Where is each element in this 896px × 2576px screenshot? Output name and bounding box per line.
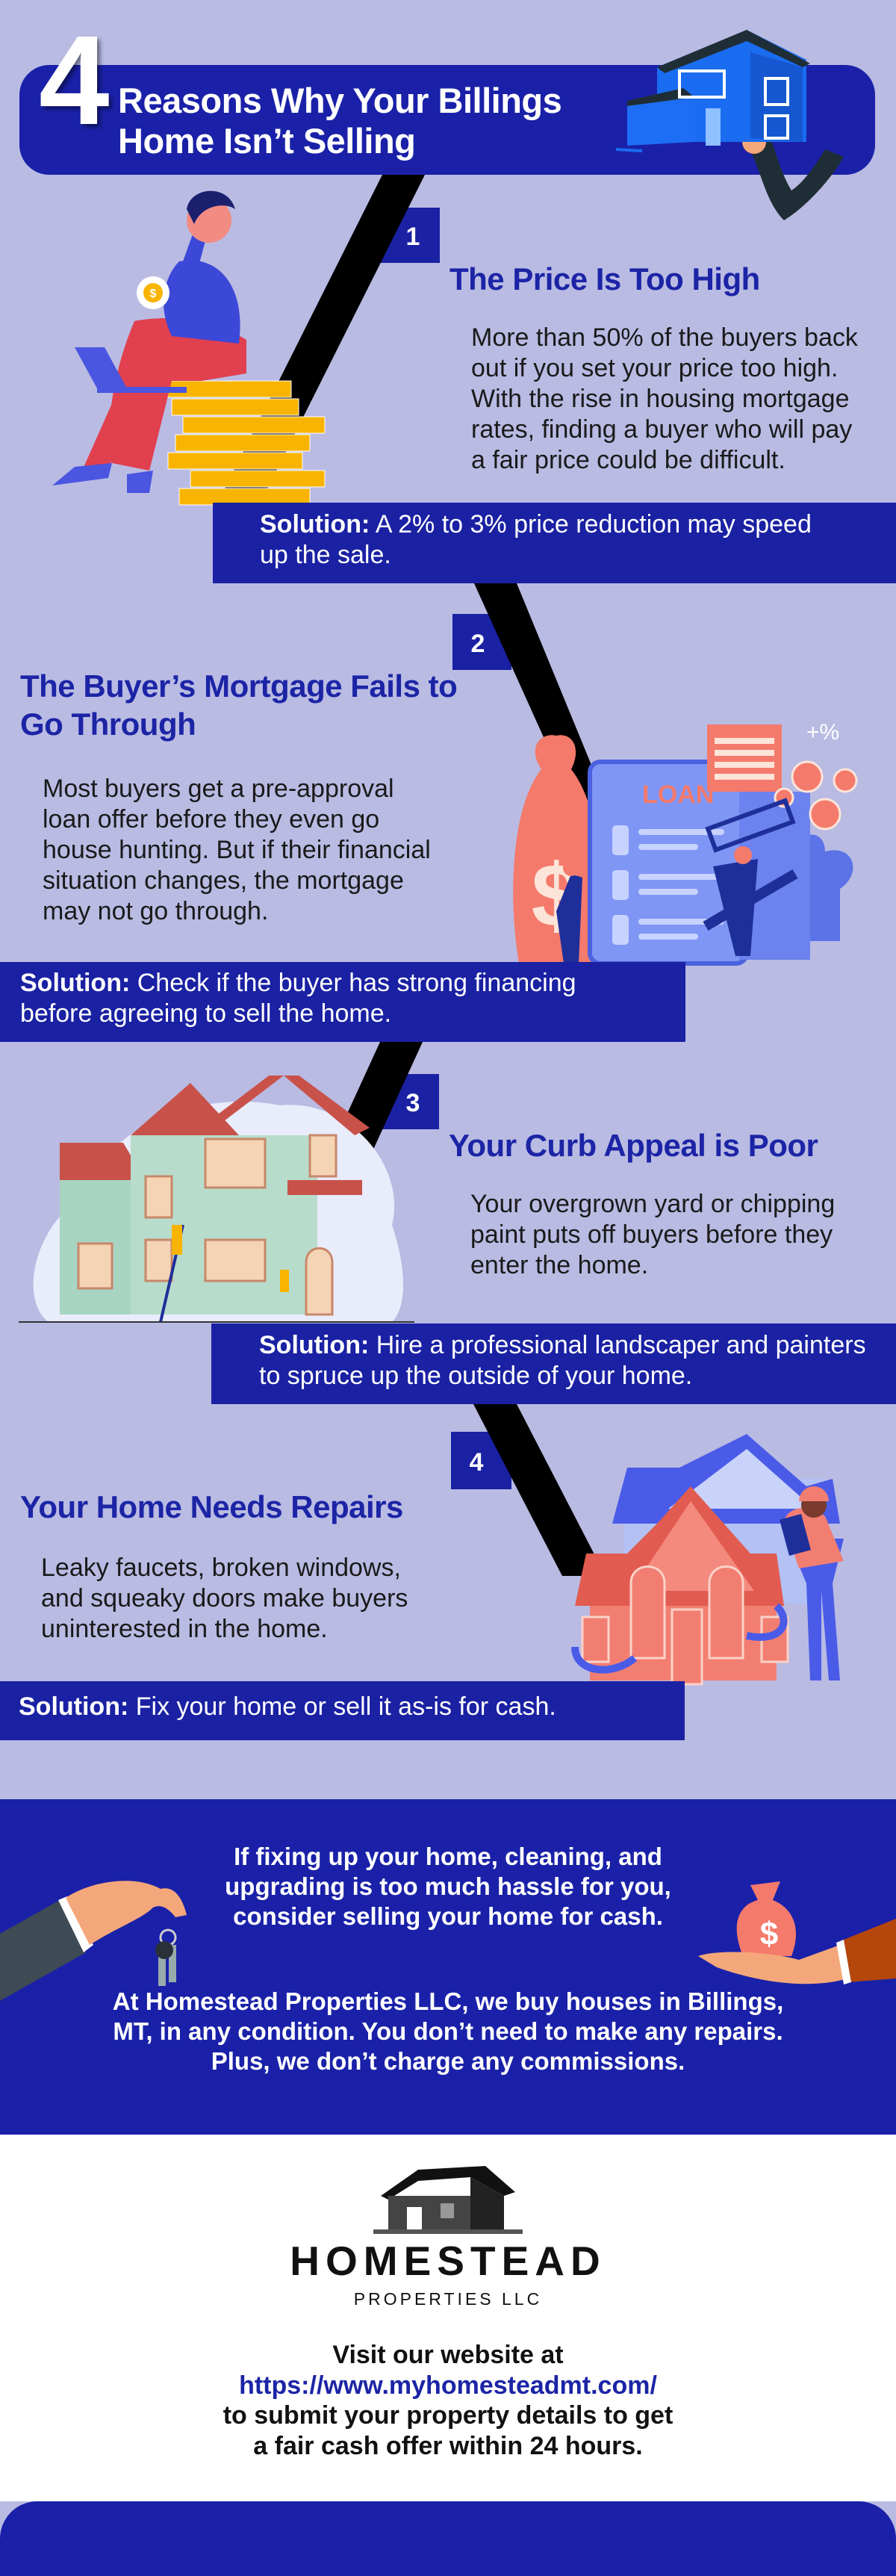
text block 1: rates, finding a buyer who will pay <box>471 415 852 444</box>
number boxes and connecting diagonal lines <box>225 175 594 1576</box>
title: Home Isn’t Selling <box>118 121 415 161</box>
icon: hand with keys <box>0 1881 187 2001</box>
text: cta paragraph 2: At Homestead Properties LLC, we buy houses in Billings, <box>113 1987 783 2015</box>
text: visit website: Visit our website at <box>332 2341 564 2369</box>
big number 4: 4 <box>39 10 110 152</box>
number box 3: 3 <box>406 1089 420 1117</box>
heading: mortgage fails <box>20 668 457 742</box>
text: visit website: to submit your property details to get <box>223 2401 673 2430</box>
section 2 illustration: loan document <box>513 720 857 966</box>
solution 1: up the sale. <box>260 541 391 569</box>
section 1 illustration: person on coins: $ <box>150 288 157 300</box>
connecting line 4 <box>473 1404 606 1576</box>
text block 2: Most buyers get a pre-approval <box>43 775 394 803</box>
text block 3: Your overgrown yard or chipping <box>470 1190 835 1218</box>
text block 3: paint puts off buyers before they <box>470 1220 833 1249</box>
solution 4: Solution: Fix your home or sell it as-is for cash. <box>19 1692 556 1721</box>
text block 2: may not go through. <box>43 897 268 925</box>
section 2 illustration: loan document: +% <box>806 720 839 745</box>
solution 1: Solution: A 2% to 3% price reduction may speed <box>260 510 812 539</box>
text block 4 <box>41 1554 408 1643</box>
text: cta paragraph 1 <box>225 1843 671 1930</box>
section 4 illustration: house repair <box>571 1434 844 1685</box>
solution 3: to spruce up the outside of your home. <box>259 1362 692 1390</box>
text: cta paragraph 2: MT, in any condition. You don’t need to make any repairs. <box>113 2017 783 2045</box>
text block 3: enter the home. <box>470 1251 648 1279</box>
icon: hand with money bag: $ <box>760 1916 778 1952</box>
header band <box>19 65 875 175</box>
solution 1 <box>213 503 896 583</box>
solution 3: Solution: Hire a professional landscaper and painters <box>259 1331 866 1359</box>
heading: curb appeal: Your Curb Appeal is Poor <box>449 1128 818 1163</box>
text block 2 <box>43 775 431 925</box>
number box 4 <box>451 1432 511 1489</box>
section 2 illustration: loan document: LOAN <box>642 780 714 809</box>
section 3 illustration: house being painted <box>19 1076 414 1323</box>
icon: house held by arm <box>615 30 844 220</box>
logo: homestead barn <box>373 2166 523 2234</box>
number box 3 <box>371 1074 439 1129</box>
section 2 illustration: loan document: $ <box>532 845 581 946</box>
text: cta paragraph 2: Plus, we don’t charge any commissions. <box>211 2047 685 2075</box>
text block 1: More than 50% of the buyers back <box>471 323 858 352</box>
solution 2: Solution: Check if the buyer has strong financing <box>20 969 576 997</box>
panel: call to action band <box>0 1799 896 2135</box>
heading: the price is too high: The Price Is Too High <box>449 261 760 297</box>
text block 2: loan offer before they even go <box>43 805 379 834</box>
section 1 illustration: person on coins <box>52 191 326 505</box>
icon: hand with money bag <box>698 1881 896 1984</box>
text: visit website: https://www.myhomesteadmt.com/ <box>239 2371 657 2399</box>
text: visit website <box>223 2341 673 2460</box>
logo: company name: HOMESTEAD <box>290 2238 606 2284</box>
text block 1 <box>471 323 858 474</box>
heading: home needs repairs: Your Home Needs Repairs <box>20 1489 403 1524</box>
panel: footer white <box>0 2135 896 2501</box>
solution 3 <box>211 1323 896 1404</box>
text block 1: With the rise in housing mortgage <box>471 385 849 413</box>
bottom band <box>0 2501 896 2576</box>
title <box>118 81 561 161</box>
text block 3 <box>470 1190 835 1279</box>
text block 1: out if you set your price too high. <box>471 354 838 382</box>
number box 2 <box>452 614 511 670</box>
connecting line 1 <box>215 175 425 508</box>
number box 2: 2 <box>471 630 485 658</box>
text: cta paragraph 1: If fixing up your home, cleaning, and <box>234 1843 662 1870</box>
title: Reasons Why Your Billings <box>118 81 561 120</box>
heading: mortgage fails: The Buyer’s Mortgage Fails to <box>20 668 457 704</box>
logo: subtitle: PROPERTIES LLC <box>354 2289 542 2309</box>
text block 4: and squeaky doors make buyers <box>41 1584 408 1613</box>
text block 4: uninterested in the home. <box>41 1615 328 1643</box>
text: visit website: a fair cash offer within 24 hours. <box>253 2432 643 2460</box>
text: cta paragraph 1: upgrading is too much hassle for you, <box>225 1872 671 1900</box>
text block 4: Leaky faucets, broken windows, <box>41 1554 401 1582</box>
connecting line 2 <box>474 583 609 807</box>
text block 2: house hunting. But if their financial <box>43 836 431 864</box>
text: cta paragraph 2 <box>113 1987 783 2075</box>
heading: mortgage fails: Go Through <box>20 707 196 742</box>
solution 2 <box>0 962 685 1042</box>
number box 1: 1 <box>406 223 420 251</box>
text block 2: situation changes, the mortgage <box>43 866 404 895</box>
text block 1: a fair price could be difficult. <box>471 446 785 474</box>
solution 4 <box>0 1681 685 1740</box>
connecting line 3 <box>310 1042 423 1195</box>
solution 2: before agreeing to sell the home. <box>20 999 391 1028</box>
text: cta paragraph 1: consider selling your home for cash. <box>233 1902 663 1930</box>
number box 1 <box>380 208 440 263</box>
number box 4: 4 <box>470 1448 484 1477</box>
